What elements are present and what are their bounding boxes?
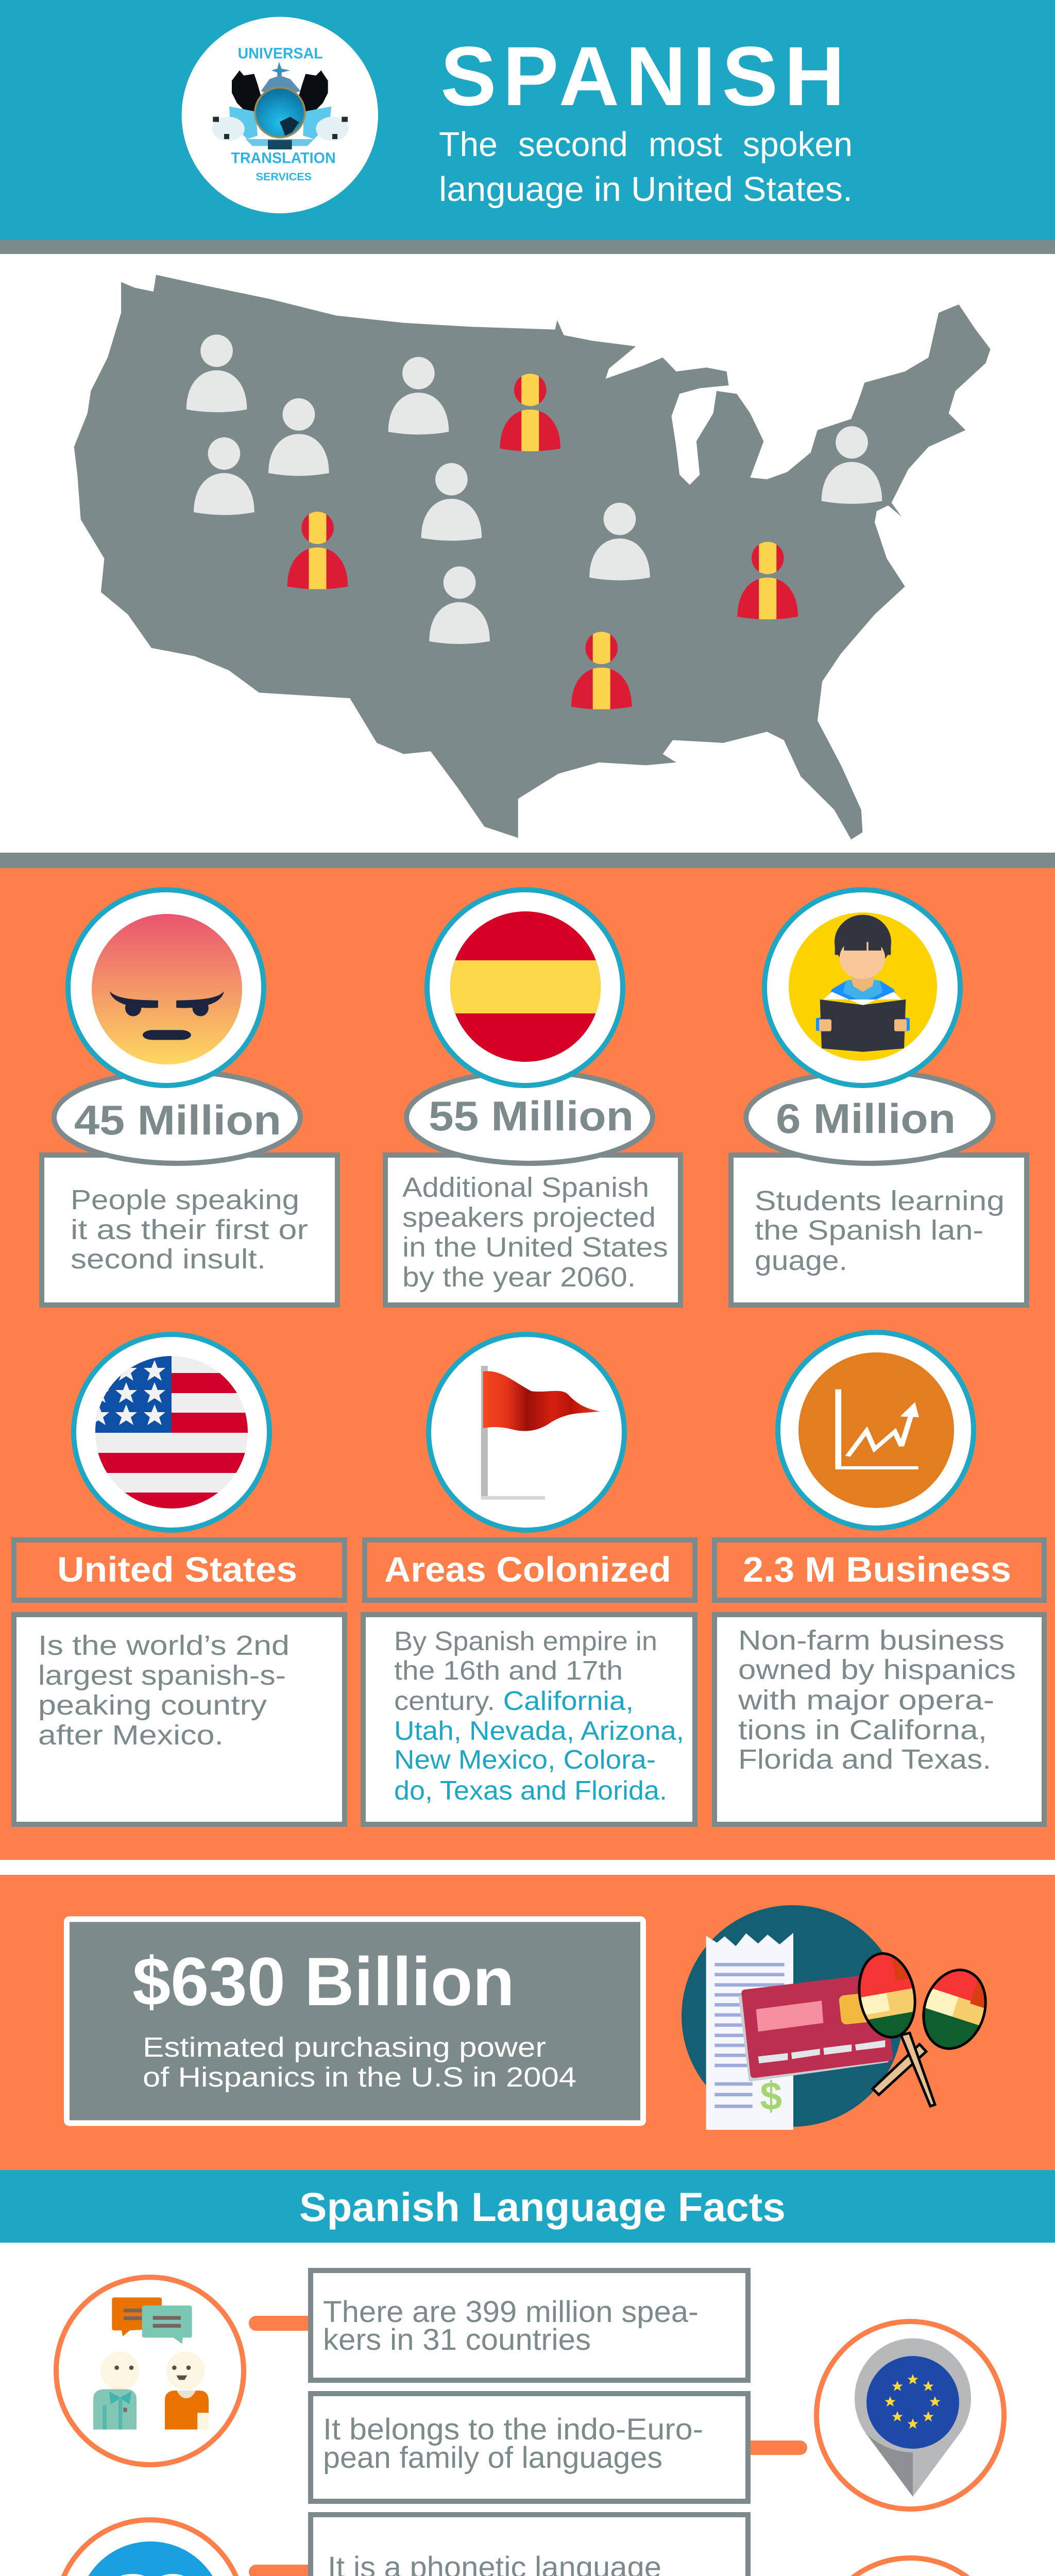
panel: 6 Million [731,890,1027,1305]
description: Is the world’s 2nd [38,1630,290,1661]
description [71,1184,308,1275]
map of United States [74,275,991,840]
description: after Mexico. [38,1720,224,1751]
icon: Universal Translation Services logo: SERVICES [256,171,312,183]
connector [249,2316,316,2331]
description: second insult. [71,1244,266,1275]
description: tions in Californa, [738,1715,987,1745]
fact: language family: pean family of languages [323,2441,662,2475]
heading: Areas Colonized [384,1550,671,1589]
description: in the United States [402,1232,668,1263]
connector [249,2565,316,2576]
text box [42,1155,337,1305]
fact: speakers [311,2270,748,2380]
heading box [714,1540,1044,1600]
panel: 45 Million [42,890,337,1305]
description: of Hispanics in the U.S in 2004 [143,2062,576,2093]
icon: Universal Translation Services logo: UNIVERSAL [238,45,323,62]
description: Additional Spanish [402,1172,649,1203]
text box [385,1155,680,1305]
panel: header [0,0,1055,254]
heading: United States [57,1550,297,1589]
panel: purchasing power [0,1875,1055,2170]
description: by the year 2060. [402,1262,636,1293]
description: Students learning [755,1185,1005,1216]
text box [363,1615,695,1824]
description: century. California, [394,1686,634,1716]
description: do, Texas and Florida. [394,1776,667,1806]
panel: language facts [56,2270,1004,2576]
fact: speakers: There are 399 million spea- [323,2295,699,2329]
description: New Mexico, Colora- [394,1745,656,1775]
icon ring [764,890,960,1086]
fact: language family [311,2394,748,2501]
description [402,1172,668,1293]
subtitle: The second most spoken [439,125,853,164]
icon: people talking [56,2277,244,2465]
panel: United States [14,1334,345,1824]
number: 45 Million [74,1097,281,1144]
icon ring [427,890,623,1086]
description: speakers projected [402,1202,656,1233]
icon: person markers grey [186,334,882,644]
description [143,2032,576,2093]
title: SPANISH [440,29,845,123]
icon: angry emoji [92,914,242,1064]
text box [731,1155,1027,1305]
badge [54,1072,300,1163]
description: guage. [755,1245,847,1276]
description: People speaking [71,1184,299,1215]
icon: Arabic letters [816,2558,1004,2576]
illustration: receipt and credit card [682,1905,903,2130]
subtitle: language in United States. [439,170,853,209]
icon: EU map pin [816,2321,1004,2509]
icon: US flag [95,1356,248,1509]
description: By Spanish empire in [394,1626,657,1656]
icon: Universal Translation Services logo [182,17,378,213]
description: peaking country [38,1690,267,1721]
fact: language family: It belongs to the indo-Euro- [323,2413,703,2446]
icon: ae ligature [56,2520,244,2576]
badge [746,1072,993,1163]
description: Non-farm business [738,1625,1005,1656]
description [738,1625,1016,1775]
fact: speakers: kers in 31 countries [323,2323,591,2357]
heading: 2.3 M Business [743,1550,1011,1589]
icon: person markers Spanish flag [287,373,798,712]
heading box [365,1540,695,1600]
description: with major opera- [738,1685,994,1716]
panel: orange statistics section [0,853,1055,1860]
panel: section title bar [0,2170,1055,2243]
number: 55 Million [429,1093,634,1140]
description: owned by hispanics [738,1654,1016,1685]
icon: growth chart [798,1352,954,1508]
panel: Areas Colonized [363,1334,695,1824]
text box [14,1615,345,1824]
description: Estimated purchasing power [143,2032,546,2063]
description [394,1626,684,1806]
description: Utah, Nevada, Arizona, [394,1716,684,1746]
icon: red flag [481,1366,600,1500]
icon ring [429,1334,624,1530]
description: the Spanish lan- [755,1215,983,1246]
badge [406,1072,653,1163]
description: largest spanish-s- [38,1660,286,1691]
subtitle [439,125,853,209]
text box [714,1615,1044,1824]
description: Florida and Texas. [738,1744,991,1775]
icon ring [68,890,264,1086]
description [38,1630,290,1751]
callout box [67,1919,643,2123]
fact: phonetic [311,2515,748,2576]
icon ring [778,1332,974,1528]
description [755,1185,1005,1276]
panel: 2.3 M Business [714,1332,1044,1824]
panel: US map with people [74,275,991,840]
heading box [14,1540,345,1600]
number: 6 Million [776,1096,956,1142]
panel: 55 Million [385,890,680,1305]
description: it as their first or [71,1214,308,1245]
icon ring [74,1334,269,1530]
connector [739,2441,807,2455]
illustration: receipt and credit card: $ [760,2075,782,2119]
icon: Spanish flag [448,909,603,1064]
heading: Spanish Language Facts [299,2184,786,2230]
icon: Universal Translation Services logo: TRANSLATION [231,150,336,167]
amount: $630 Billion [132,1944,515,2020]
illustration: maracas [858,1952,987,2108]
icon: student reading [789,912,937,1061]
description: the 16th and 17th [394,1656,623,1686]
